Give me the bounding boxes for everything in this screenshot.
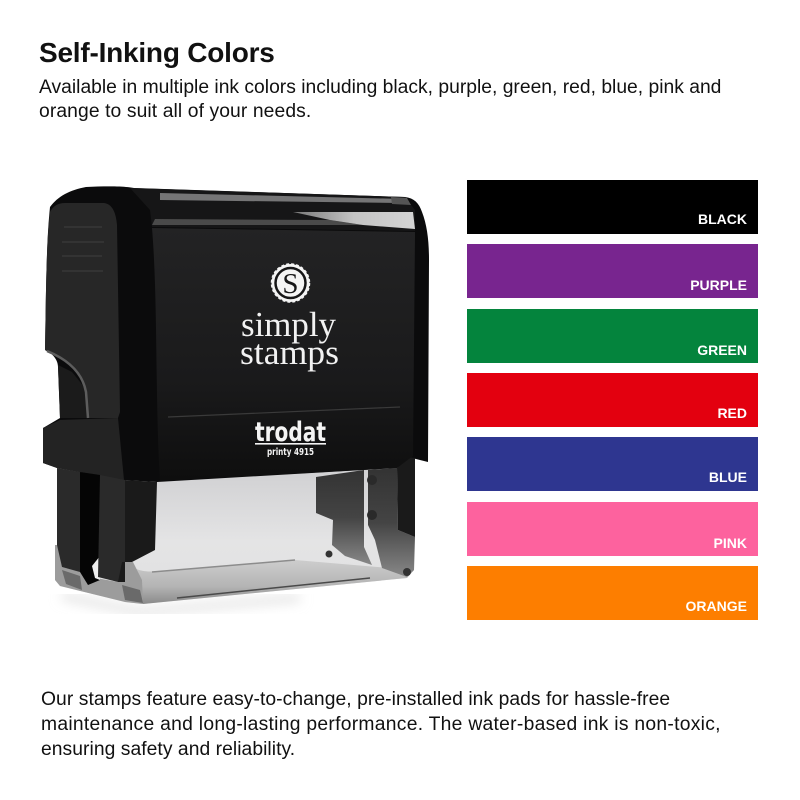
top glossy strip [130,188,415,231]
side panel [45,203,120,418]
right leg [397,457,415,537]
swatch: orange [467,566,758,620]
side grip [47,351,88,418]
left legs [57,468,157,585]
logo wordmark: stamps [240,333,339,372]
title: Self-Inking Colors [39,37,275,68]
intro text [39,77,721,122]
swatch: orange: ORANGE [686,598,747,614]
swatch: black: BLACK [698,211,747,227]
trodat brand: trodat [255,417,326,448]
swatch: pink: PINK [714,535,747,551]
closing text: maintenance and long-lasting performance. The water-based ink is non-toxic, [41,714,721,735]
trodat brand: printy 4915 [267,447,314,458]
stamp shadow [62,596,300,612]
lever flange [43,418,124,480]
panel groove [168,407,400,417]
swatch: blue [467,437,758,491]
intro text: orange to suit all of your needs. [39,101,311,122]
intro text: Available in multiple ink colors including black, purple, green, red, blue, pink and [39,77,721,98]
side ridges [62,227,104,271]
closing text [41,689,721,760]
front panel [152,228,415,481]
swatch: green [467,309,758,363]
trodat brand [255,417,326,458]
closing text: ensuring safety and reliability. [41,739,295,760]
closing text: Our stamps feature easy-to-change, pre-installed ink pads for hassle-free [41,689,670,710]
swatch: black [467,180,758,234]
black stamp body [43,186,429,482]
swatch: green: GREEN [697,342,747,358]
swatch: blue: BLUE [709,469,747,485]
logo: simply stamps seal [272,264,310,302]
logo: simply stamps seal: S [282,268,299,300]
clear base and window [55,465,415,604]
logo wordmark [240,305,339,372]
logo wordmark: simply [241,305,336,344]
swatch: red: RED [717,405,747,421]
swatch: red [467,373,758,427]
swatch: purple: PURPLE [690,277,747,293]
swatch: purple [467,244,758,298]
swatch: pink [467,502,758,556]
internal mechanism [316,468,415,577]
